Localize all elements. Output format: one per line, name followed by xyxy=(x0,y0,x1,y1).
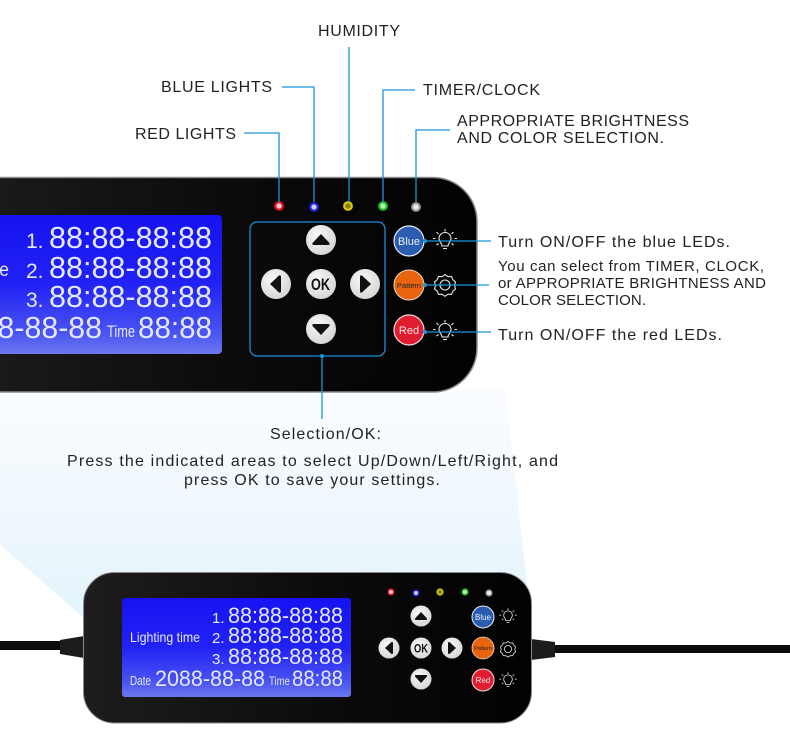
small LCD screen xyxy=(122,598,351,697)
text: red LEDs: Turn ON/OFF the red LEDs. xyxy=(498,327,722,344)
label: brightness and color: APPROPRIATE BRIGHTNESS xyxy=(457,113,689,130)
light beam background xyxy=(0,388,531,640)
small row 4: Time xyxy=(269,674,290,688)
label: brightness and color xyxy=(457,113,689,147)
pattern button xyxy=(394,270,424,300)
callout lines xyxy=(244,47,491,419)
small pattern button xyxy=(472,637,494,659)
small row 4: 2088-88-88 xyxy=(155,666,265,691)
selection box xyxy=(250,222,385,356)
large LCD screen xyxy=(0,215,222,354)
text: selection description: Press the indicated areas to select Up/Down/Left/Right, and xyxy=(67,453,558,470)
icon: bulb top xyxy=(433,229,457,248)
small blue button: Blue xyxy=(475,613,492,622)
small row 3: 3. xyxy=(212,651,225,668)
small row 4: Date xyxy=(130,673,151,688)
row 4: Time xyxy=(107,322,135,341)
text: pattern description: COLOR SELECTION. xyxy=(498,292,646,309)
text: pattern description xyxy=(498,258,766,309)
small row 2: 88:88-88:88 xyxy=(228,623,343,648)
row 3: 3. xyxy=(26,289,44,312)
small direction buttons xyxy=(378,606,462,690)
small red button xyxy=(472,669,494,691)
small row 2: 2. xyxy=(212,630,225,647)
row 3: 88:88-88:88 xyxy=(49,279,212,314)
LED indicators xyxy=(275,202,420,211)
small red button: Red xyxy=(476,676,490,685)
small icon: bulb top xyxy=(499,608,517,622)
row 1: 1. xyxy=(26,230,44,253)
small row 1: 1. xyxy=(212,610,225,627)
small blue button xyxy=(472,606,494,628)
large controller panel xyxy=(0,178,477,392)
small direction buttons: OK xyxy=(414,642,428,656)
row 4 xyxy=(0,310,212,345)
icon: gear xyxy=(434,274,456,296)
small pattern button: Pattern xyxy=(474,646,492,652)
red button xyxy=(394,315,424,345)
small row 3: 88:88-88:88 xyxy=(228,644,343,669)
small row 4 xyxy=(130,666,343,691)
text: pattern description: You can select from TIMER, CLOCK, xyxy=(498,258,764,275)
blue button: Blue xyxy=(398,236,420,248)
label: humidity: HUMIDITY xyxy=(318,23,400,40)
small icon: gear xyxy=(500,641,516,657)
label: red lights: RED LIGHTS xyxy=(135,126,236,143)
pattern button: Pattern xyxy=(397,281,421,290)
text: blue LEDs: Turn ON/OFF the blue LEDs. xyxy=(498,234,730,251)
row 2: 2. xyxy=(26,260,44,283)
direction buttons xyxy=(261,225,380,344)
text: pattern description: or APPROPRIATE BRIGHTNESS AND xyxy=(498,275,766,292)
small LEDs xyxy=(388,589,492,596)
red button: Red xyxy=(399,325,419,337)
direction buttons: OK xyxy=(311,275,331,294)
label: timer clock: TIMER/CLOCK xyxy=(423,82,540,99)
cables xyxy=(0,636,790,660)
small controller xyxy=(84,572,532,723)
small lighting time label: Lighting time xyxy=(130,629,200,645)
small row 4: 88:88 xyxy=(292,666,343,691)
text: selection description: press OK to save your settings. xyxy=(184,472,440,489)
small row 1: 88:88-88:88 xyxy=(228,603,343,628)
text: selection description xyxy=(67,453,558,489)
row 2: 88:88-88:88 xyxy=(49,250,212,285)
icon: bulb bottom xyxy=(433,320,457,340)
label: brightness and color: AND COLOR SELECTION. xyxy=(457,130,664,147)
small icon: bulb bottom xyxy=(499,672,517,686)
label: blue lights: BLUE LIGHTS xyxy=(161,79,272,96)
blue button xyxy=(394,226,424,256)
row 4: 88:88 xyxy=(138,310,212,345)
text: selection heading: Selection/OK: xyxy=(270,426,381,443)
row 1: 88:88-88:88 xyxy=(49,220,212,255)
